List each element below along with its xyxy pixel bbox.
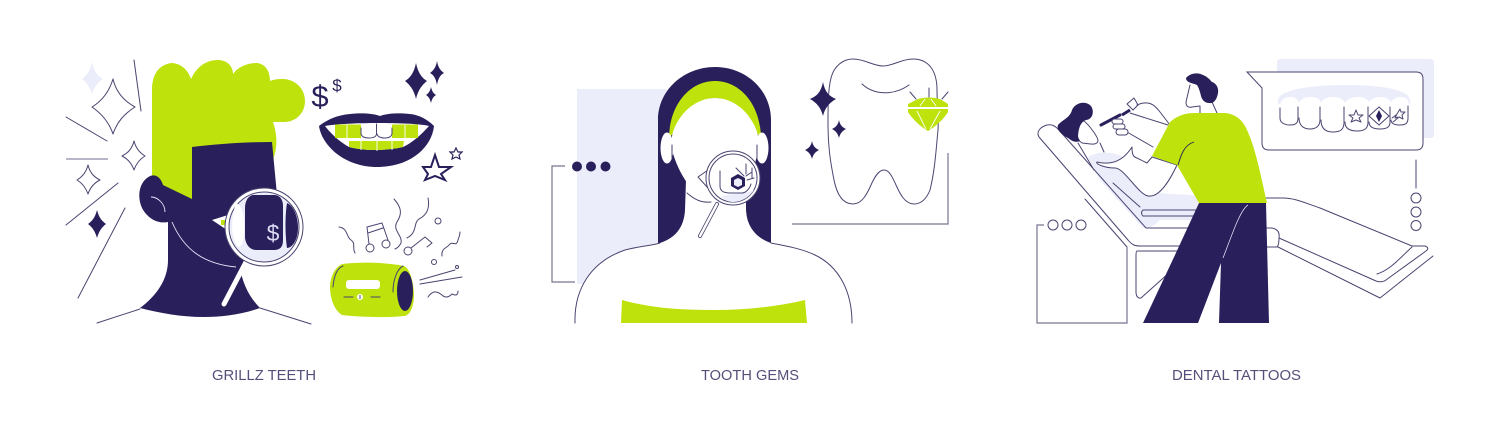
icon: sparkles and rays <box>66 60 145 298</box>
ears <box>660 132 674 164</box>
icon: sound lines <box>420 270 462 297</box>
caption: DENTAL TATTOOS <box>1172 368 1301 384</box>
panel: tooth gems <box>552 59 948 384</box>
icon: dollar signs: $ <box>311 79 329 114</box>
frame line <box>792 153 948 224</box>
icon: dots <box>572 162 610 172</box>
magnifier <box>224 188 303 304</box>
dentist tools and arm lines <box>1101 98 1170 147</box>
hair <box>658 67 771 245</box>
icon: dollar signs <box>311 76 342 114</box>
bracket <box>552 166 575 282</box>
dentist head <box>1186 73 1218 113</box>
face <box>672 98 758 203</box>
icon: gem <box>908 88 948 131</box>
pants <box>1143 203 1269 323</box>
icon: three dots vertical <box>1411 160 1421 230</box>
shoulder lines <box>97 308 311 324</box>
tooth <box>828 59 938 204</box>
tooth ridge <box>862 84 909 93</box>
patient <box>1058 103 1177 196</box>
caption: GRILLZ TEETH <box>212 368 316 384</box>
background panel <box>577 89 667 284</box>
icon: outline stars <box>423 148 462 180</box>
icon: music notes and squiggles <box>339 198 460 268</box>
shirt <box>1152 113 1267 203</box>
panel: dental tattoos <box>1037 59 1434 384</box>
woman body <box>575 180 852 323</box>
callout background <box>1277 59 1434 138</box>
outline box <box>1037 220 1127 323</box>
callout <box>1247 72 1423 150</box>
hair <box>152 60 305 215</box>
icon: sparkles <box>805 82 846 159</box>
icon: speaker <box>330 263 414 317</box>
top <box>621 300 807 323</box>
panel: grillz teeth <box>66 60 462 384</box>
headband <box>669 81 761 137</box>
magnifier <box>698 151 760 236</box>
patient arm <box>1097 147 1177 196</box>
mouth with grillz <box>319 113 434 167</box>
icon: stars dark <box>405 61 444 103</box>
caption: TOOTH GEMS <box>701 368 799 384</box>
icon: dollar signs: $ <box>332 76 342 95</box>
head and neck <box>139 142 280 317</box>
magnifier: $ <box>267 220 280 246</box>
ear and jaw lines <box>151 197 236 267</box>
dental chair <box>1038 125 1433 298</box>
eye detail <box>212 215 230 232</box>
